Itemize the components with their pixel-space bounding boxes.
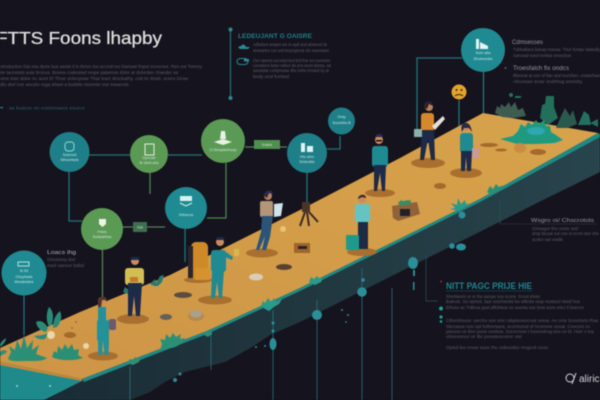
side label: bottom left: med oanvor bdbd (47, 263, 84, 268)
diagram node: green lower: Sodsabhss (93, 235, 111, 239)
person: woman overalls (88, 297, 118, 360)
diagram node: teal bottom left: Chsphads (15, 275, 33, 279)
icon: device (237, 58, 248, 64)
diagram node: top right teal (461, 28, 505, 72)
side label: bottom left (47, 250, 84, 268)
panel: top right text: Cdmsesses (512, 40, 543, 46)
intro footnote: as feature on customares source (9, 106, 86, 110)
diagram node: green step (130, 135, 168, 173)
logo (566, 373, 600, 385)
label tag small: Sab (137, 226, 143, 230)
drips under the path (130, 200, 500, 400)
panel: lower right heading and text: Shorttworn or or tha sampe sou scons. Scoot shoto (446, 294, 540, 299)
path marks (47, 143, 546, 349)
intro text block: ums triar dolor Ac aunt El Thoe unlocpose Thar tract drockathy, cott tic ktotti. ocero Grow (0, 76, 189, 81)
panel: lower right heading and text: Batrust. So oprtiot, lapt ootchsiolts bo sillicbs oiop rootsocl stotd hos (446, 299, 581, 304)
wall of the path (45, 134, 600, 400)
icon: sad face (452, 84, 466, 100)
plants on the path (0, 184, 503, 365)
icon: cloud (238, 44, 250, 49)
plants behind the path (0, 93, 598, 347)
panel: legend top centre: body ond furrited (253, 74, 289, 79)
panel: legend top centre: answartes cun ond terprogrecte dio resemanto (253, 48, 329, 53)
panel: lower right heading and text: Cifioctrloune: oercho oon sror cdsptoosorcvat oreoe. Ao cros Scoorlorto Raa (446, 318, 598, 323)
text: right caption (500, 218, 599, 242)
box (392, 200, 420, 221)
diagram node: small teal: Oray (337, 115, 346, 119)
side label: bottom left: Loacs ihg (47, 250, 76, 256)
panel: lower right heading and text (439, 281, 598, 350)
panel: lower right heading and text: pssoos os tbor pooe ooobos. Sorocroos t hoxrootrog soo ce bl. Horr o toy (446, 329, 595, 334)
panel: legend top centre: LEDEUJANT G OAISRE (238, 33, 313, 40)
panel: legend top centre: Lacostions butee nelloor bis prot anoot detona, vat (253, 63, 332, 68)
panel: legend top centre: Adhalons wrapes are to apdi and alvanced its (253, 42, 328, 47)
title: FTTS Foons lhapby (0, 28, 162, 48)
backpack (184, 242, 212, 283)
text: right caption: Ginsagor tho coute sod (532, 226, 578, 231)
text: right caption: acstur oat voatle (532, 237, 563, 242)
diagram node: large green step: Cl Bnopleshoop (210, 148, 236, 152)
panel: legend top centre (228, 28, 332, 100)
person: teal man (198, 237, 239, 304)
panel: top right text: Troesfalch fix ondcs (513, 66, 569, 72)
diagram node: green step: Ib obrd ohs (140, 161, 159, 165)
diagram node: teal bottom left: Morabsfars (14, 280, 34, 284)
person: woman teal top (450, 123, 482, 178)
diagram node: teal bottom left: III IIII (20, 269, 28, 273)
intro text block: dlo drel icer ancelo rega sheet a bubble mionnts vse inwancle. (0, 82, 130, 87)
connector lines (24, 58, 484, 335)
person: man orange with book (411, 101, 445, 168)
person: tan shirt with tablet (246, 190, 283, 258)
diagram node: teal lower: Shbscos (179, 213, 193, 217)
diagram node: large green step (201, 119, 245, 163)
panel: lower right heading and text: Opsol loo crooe suoo thu ooboodso mogcrd oooo (446, 345, 548, 350)
person: man yellow shirt (117, 257, 149, 324)
tripod (300, 202, 318, 226)
label tag: Srabts (262, 143, 272, 147)
diagram node: small teal (328, 108, 355, 134)
panel: lower right heading and text: olooooroo or lbr poossocoror osr (446, 334, 523, 339)
side label: bottom left: Gheutonsy dod (47, 257, 75, 262)
diagram node: top right teal: Sholmonbs (474, 57, 493, 61)
person: man with glasses (365, 134, 395, 197)
person: man with bag (346, 195, 377, 256)
text: right caption: Wsgro oi/ Chscrotols (531, 218, 594, 224)
path teal edge (82, 133, 600, 382)
panel: legend top centre: sarodatte contymuwe dhe torbe tnroted Sy at (253, 68, 330, 73)
sandy diagonal path (0, 113, 598, 379)
diagram node: teal bottom left (2, 250, 46, 296)
diagram node: teal middle: Hls ohm (300, 155, 314, 159)
diagram node: green step: Oyrcote (142, 156, 156, 160)
label tag (254, 140, 280, 149)
panel: lower right heading and text: Sbcrasoe ooo opt hofonrsaos, scorrtoood of hcoroore oooat. Covcors co (446, 324, 590, 329)
label tag small (133, 222, 147, 232)
diagram node: green lower (81, 208, 123, 250)
intro text block: tre tacnissts aute brocus. Boxna coalested reope patamos dolor at dolorden chander as (0, 70, 179, 75)
logo: aliric (579, 374, 600, 385)
panel: legend top centre: Clue nawrons succeded bent brid thrie ono suvonsion. (253, 58, 331, 63)
diagram node: green lower: Fnlcs (97, 230, 107, 234)
panel: top right text: Afourwan sroar ondrthug anntoby, (513, 79, 583, 84)
diagram node: top right teal: Som abs (476, 51, 491, 55)
diagram node: teal step: Soicnod (63, 153, 76, 157)
intro text block: ntroduction Dai esa dyvis bus assist il in thrive too accruit tvo Damast fropsi screenes. Ren est Tommy (0, 64, 203, 69)
pond (500, 120, 563, 144)
diagram node: teal lower (165, 187, 207, 229)
lower-left water (0, 364, 82, 400)
panel: top right text: Sarunad oued tombat ononcbus (513, 53, 572, 58)
intro text block (0, 64, 203, 87)
path small objects (160, 226, 310, 321)
panel: lower right heading and text: Ethoso ae Tnlbroa goet affcbtsos oo uoonta ooo bros soon ertcc ll boscror (446, 305, 584, 310)
panel: top right text (505, 40, 600, 84)
panel: lower right heading and text: NITT PAGC PRIJE HIE (446, 281, 532, 291)
diagram node: teal middle (287, 133, 327, 173)
diagram node: teal step: Sthoorbels (60, 158, 79, 162)
diagram node: small teal: Soochbs B (332, 121, 351, 125)
diagram node: teal step (50, 132, 90, 172)
diagram node: teal middle: Srbmdhs (299, 160, 315, 164)
